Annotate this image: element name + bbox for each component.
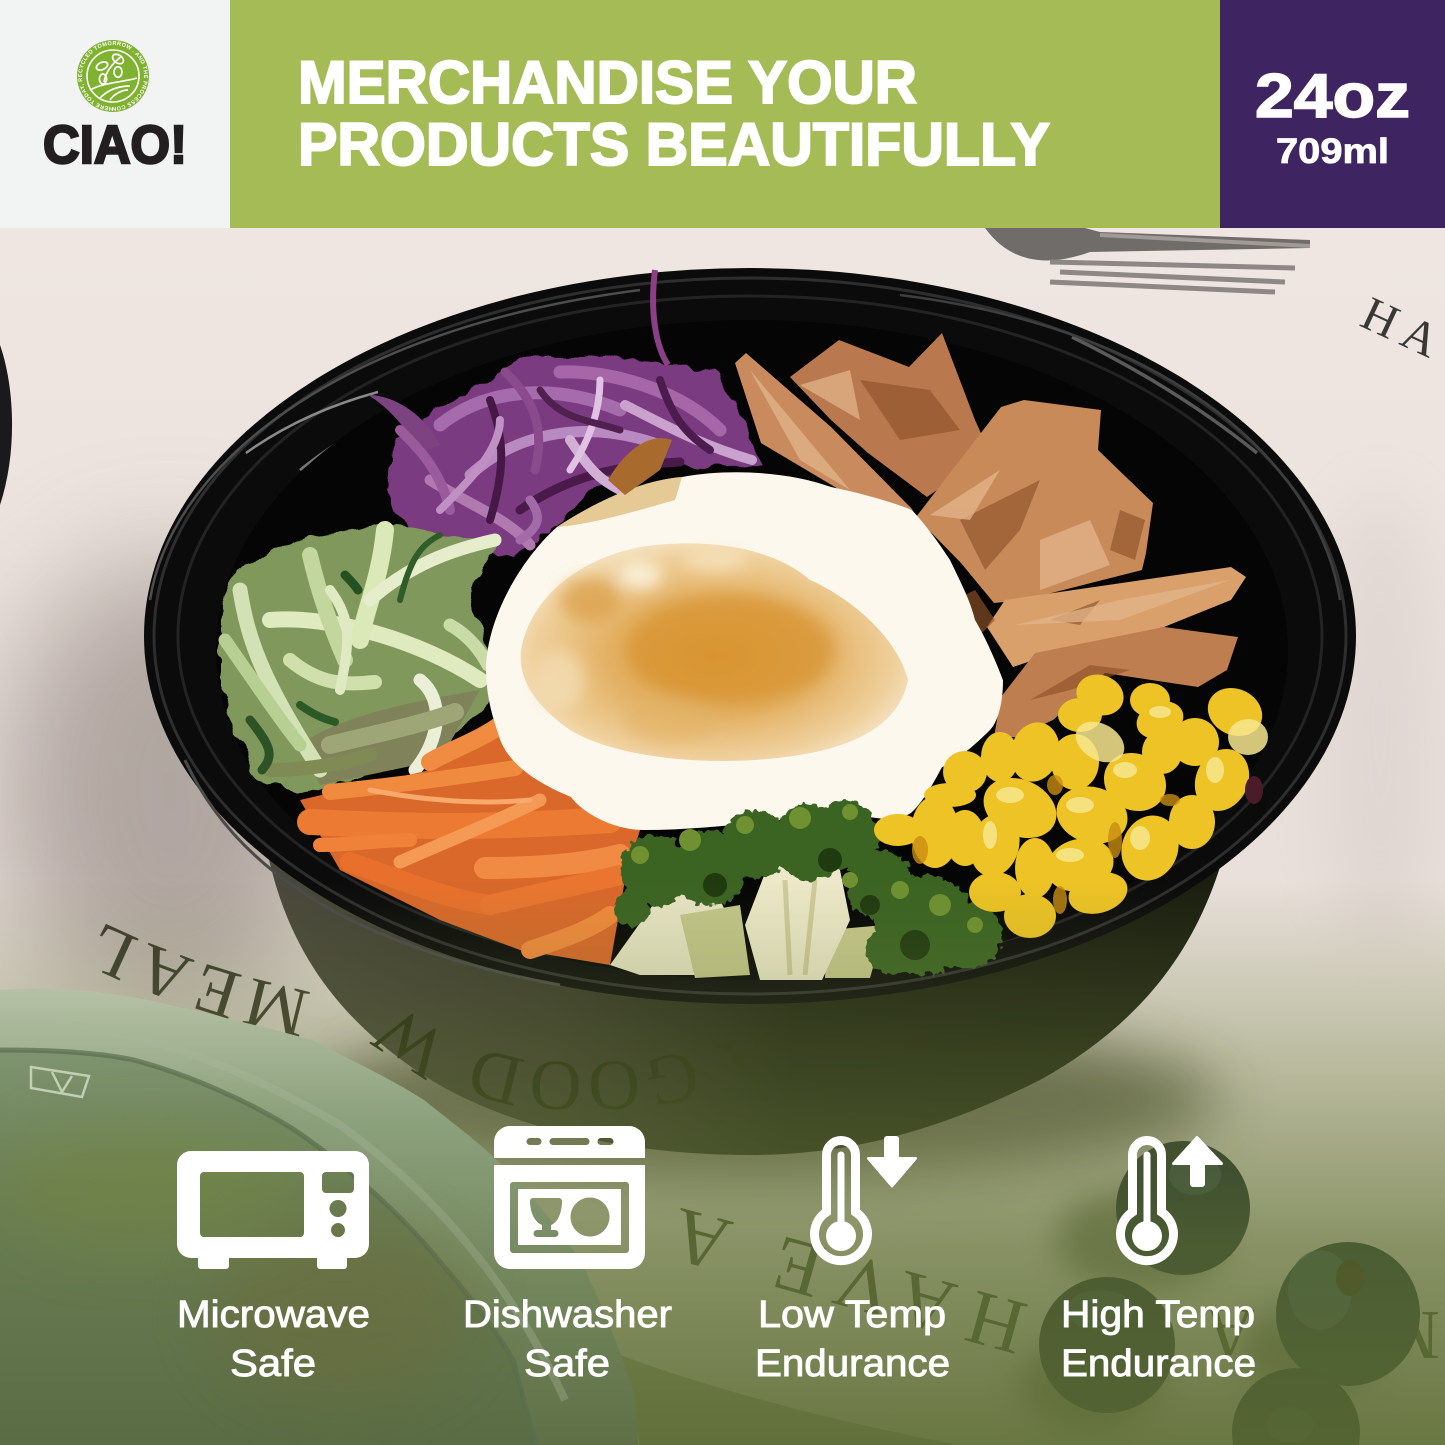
bowl <box>144 268 1356 1206</box>
capacity in millilitres: 709ml <box>1276 132 1389 171</box>
tablecloth lettering, top right: H A <box>1353 287 1445 368</box>
label: microwave safe: Microwave <box>177 1294 370 1336</box>
label: microwave safe: Safe <box>230 1343 316 1385</box>
bowl rim <box>144 268 1356 1004</box>
lettering on bowl side: A GOOD W <box>369 1014 695 1110</box>
green gradient overlay <box>0 880 1445 1445</box>
purple cabbage <box>368 270 762 557</box>
capacity in ounces: 24oz <box>1255 62 1410 131</box>
label: dishwasher safe <box>463 1294 672 1385</box>
embossed dishwasher mark on lid <box>31 1067 89 1097</box>
feature: high temp endurance <box>1061 1136 1256 1385</box>
tablecloth lettering: MEAL, left: MEAL <box>100 924 310 1036</box>
shadow: left of bowl <box>0 560 340 1020</box>
translucent lid, bottom left <box>0 989 638 1445</box>
blueberries <box>1020 1141 1420 1445</box>
tablecloth lettering: HAVE A: HAVE A <box>680 1208 1028 1354</box>
label: high temp endurance: High Temp <box>1061 1294 1255 1336</box>
label: microwave safe <box>177 1294 370 1385</box>
chicken <box>735 333 1246 737</box>
cucumber <box>221 523 500 790</box>
title: MERCHANDISE YOUR <box>298 49 917 116</box>
feature: microwave safe <box>177 1151 370 1385</box>
broccoli <box>610 801 1002 980</box>
icon: dishwasher <box>494 1126 645 1269</box>
kidney bean <box>1245 776 1263 804</box>
label: low temp endurance <box>755 1294 950 1385</box>
title <box>298 49 1050 178</box>
label: high temp endurance <box>1061 1294 1256 1385</box>
bowl inside <box>216 320 1288 980</box>
neighbouring bowl edge <box>0 345 12 505</box>
bowl shadow <box>300 1020 1220 1180</box>
logo wordmark: CIAO! <box>43 115 187 175</box>
food <box>221 270 1270 980</box>
bowl body <box>265 840 1225 1155</box>
carrots <box>300 720 640 965</box>
label: dishwasher safe: Safe <box>524 1343 610 1385</box>
fried egg <box>486 438 1003 830</box>
fork <box>985 228 1310 292</box>
feature: dishwasher safe <box>463 1126 672 1385</box>
feature: low temp endurance <box>755 1136 950 1385</box>
tablecloth lettering: MEAL, right: MEAL <box>1205 1308 1438 1358</box>
icon: thermometer with down arrow <box>815 1136 917 1261</box>
label: dishwasher safe: Dishwasher <box>463 1294 672 1336</box>
icon: olive branch seal <box>77 40 149 112</box>
icon: microwave <box>177 1151 369 1269</box>
label: high temp endurance: Endurance <box>1061 1343 1256 1385</box>
panel: capacity badge <box>1220 0 1445 228</box>
icon: thermometer with up arrow <box>1120 1136 1223 1261</box>
label: low temp endurance: Low Temp <box>758 1294 946 1336</box>
title: PRODUCTS BEAUTIFULLY <box>298 111 1050 178</box>
sweet corn <box>874 668 1270 938</box>
curved mat edge <box>620 1355 960 1445</box>
panel: logo <box>0 0 230 228</box>
label: low temp endurance: Endurance <box>755 1343 950 1385</box>
panel: headline banner <box>230 0 1220 228</box>
